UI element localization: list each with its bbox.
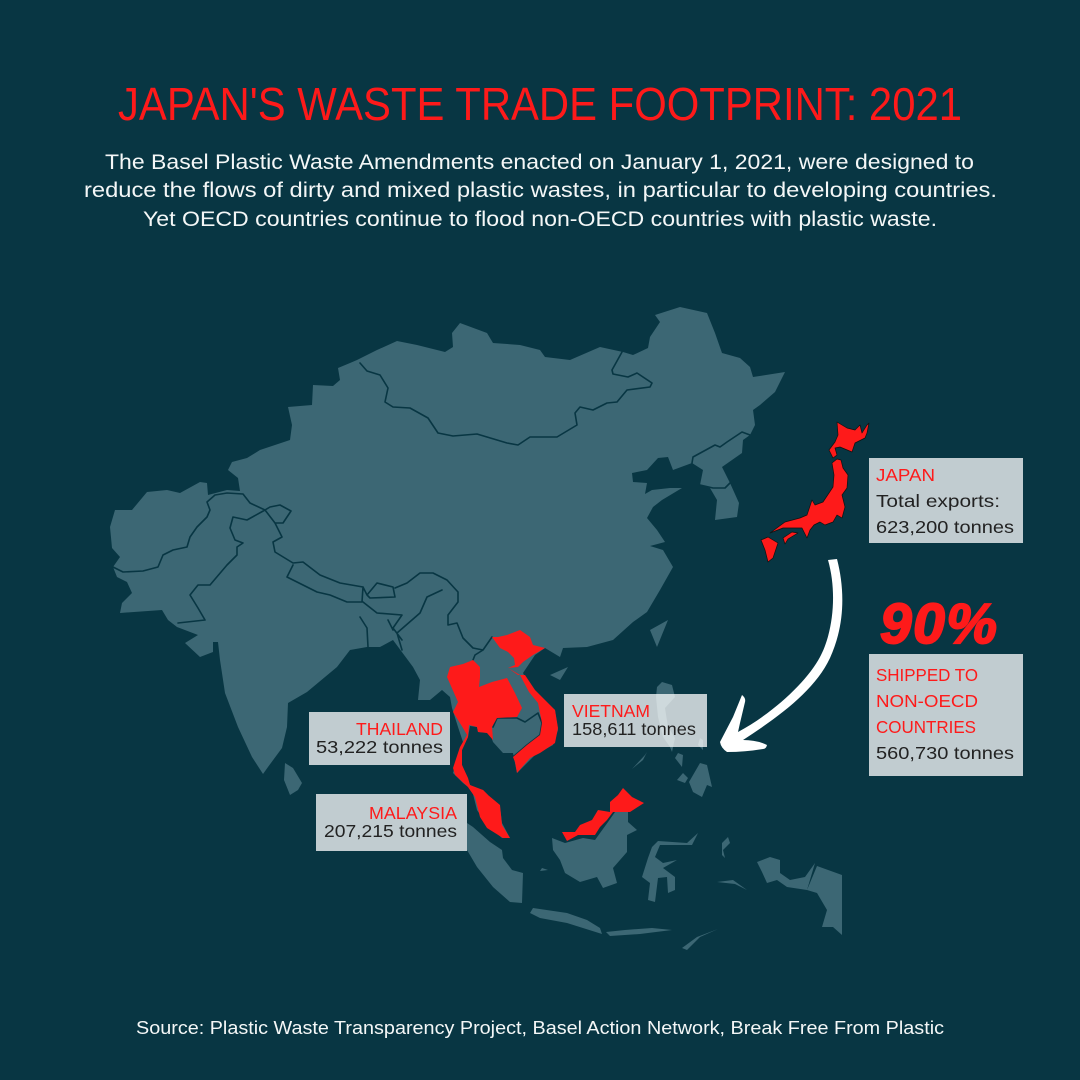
callout: shipped to non-OECD countries xyxy=(869,654,1023,776)
intro text block: The Basel Plastic Waste Amendments enacted on January 1, 2021, were designed to xyxy=(105,151,974,174)
Vietnam xyxy=(492,630,558,773)
intro text block: Yet OECD countries continue to flood non-OECD countries with plastic waste. xyxy=(143,208,937,231)
callout: Vietnam: VIETNAM xyxy=(572,701,650,721)
mainland Asia xyxy=(110,307,785,838)
islands of Southeast Asia xyxy=(284,620,842,950)
callout: Thailand: THAILAND xyxy=(356,719,443,739)
callout: shipped to non-OECD countries: NON-OECD xyxy=(876,691,978,711)
callout: Vietnam xyxy=(564,694,707,747)
callout: Thailand: 53,222 tonnes xyxy=(316,737,443,757)
callout: shipped to non-OECD countries: 560,730 tonnes xyxy=(876,743,1014,763)
arrow from Japan to Southeast Asia xyxy=(720,559,842,752)
Japan xyxy=(761,422,869,562)
callout: Japan total exports: 623,200 tonnes xyxy=(876,517,1014,537)
country borders xyxy=(113,352,750,757)
source line: Source: Plastic Waste Transparency Project, Basel Action Network, Break Free From Plastic xyxy=(136,1018,944,1038)
callout: Japan total exports: Total exports: xyxy=(876,491,1000,511)
callout: Japan total exports: JAPAN xyxy=(876,465,935,485)
callout: shipped to non-OECD countries: COUNTRIES xyxy=(876,717,976,737)
map of Asia xyxy=(110,307,842,950)
callout: Malaysia: MALAYSIA xyxy=(369,803,457,823)
callout: Thailand xyxy=(309,712,450,765)
callout: Japan total exports xyxy=(869,458,1023,543)
callout: shipped to non-OECD countries: SHIPPED TO xyxy=(876,665,978,685)
Malaysia Borneo xyxy=(562,788,644,841)
callout: Malaysia xyxy=(316,794,467,851)
title: JAPAN'S WASTE TRADE FOOTPRINT: 2021 xyxy=(118,78,962,130)
intro text block: reduce the flows of dirty and mixed plastic wastes, in particular to developing countries. xyxy=(84,179,997,202)
callout: Malaysia: 207,215 tonnes xyxy=(324,821,457,841)
highlighted countries xyxy=(447,422,869,841)
Malaysia peninsula xyxy=(468,787,510,838)
callout: Vietnam: 158,611 tonnes xyxy=(572,719,696,739)
Thailand xyxy=(447,660,522,797)
big stat: 90%: 90% xyxy=(880,592,997,656)
intro text block xyxy=(84,151,997,231)
